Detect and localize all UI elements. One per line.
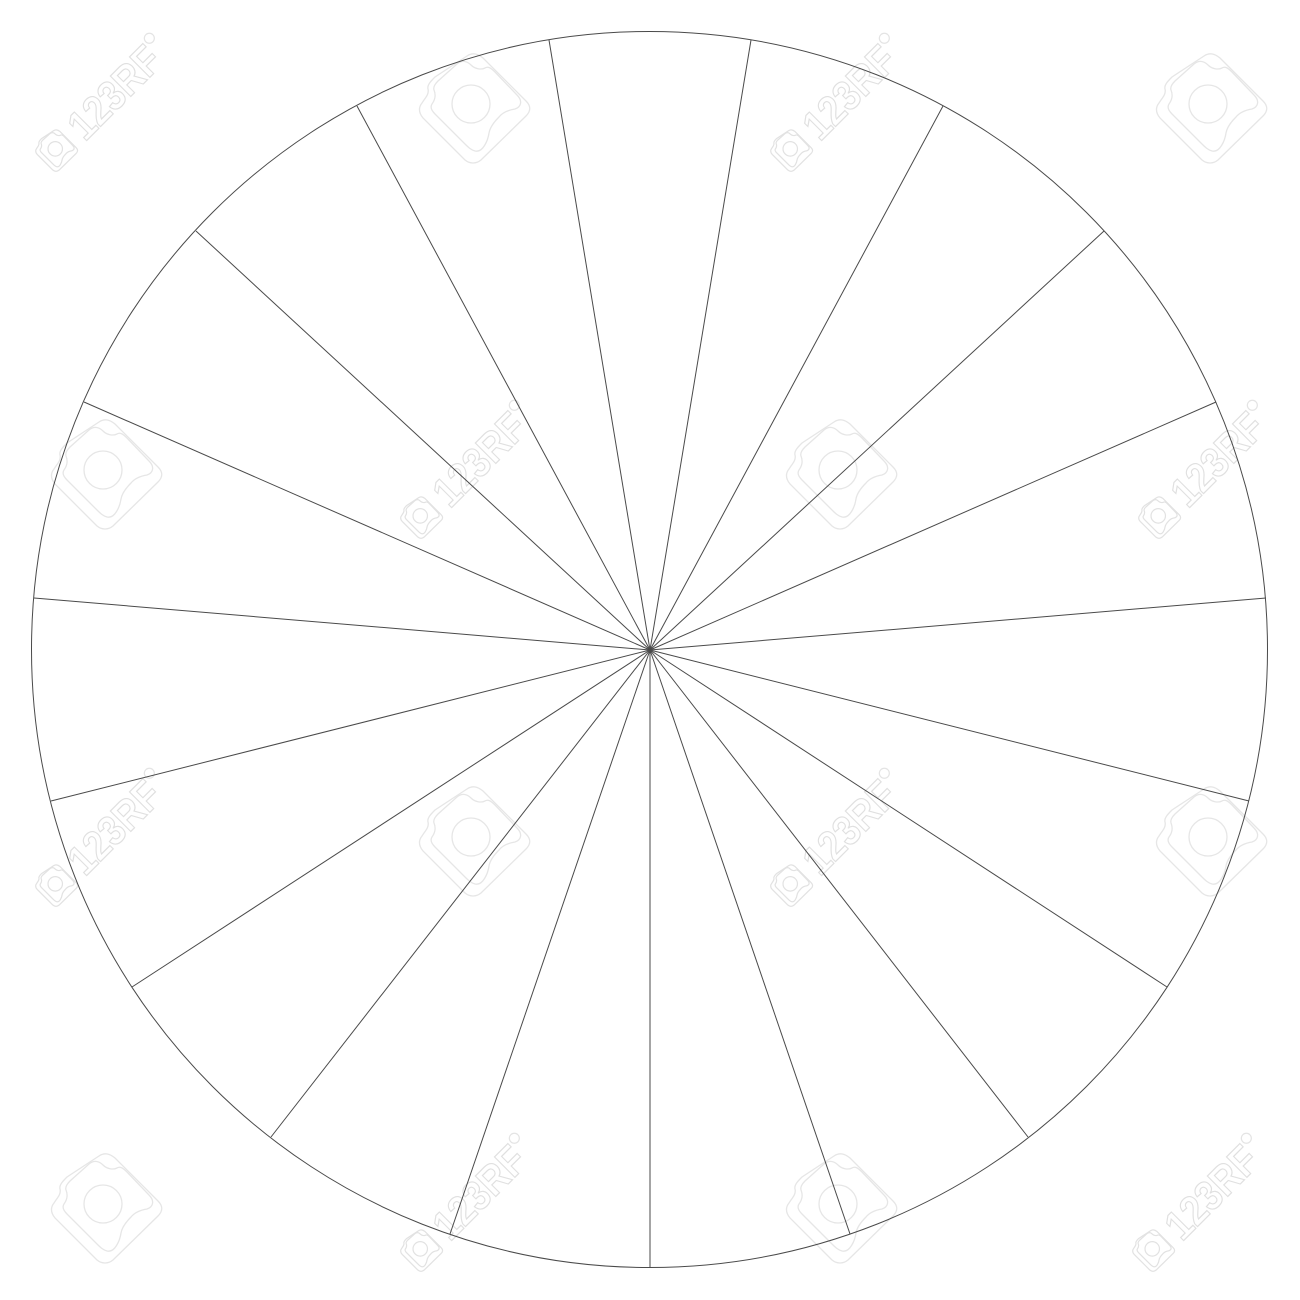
watermark logo bottom centre <box>401 1128 544 1271</box>
watermark logo middle centre <box>401 395 544 538</box>
watermark camera icon row 3 centre <box>419 787 530 896</box>
watermark camera icon row 1 right <box>1156 54 1267 163</box>
watermark logo middle right <box>1139 395 1282 538</box>
watermark camera icon row 1 <box>419 54 530 163</box>
watermark logo top left <box>36 28 179 171</box>
watermark camera icon row 2 centre <box>786 420 897 529</box>
watermark logo bottom right <box>1133 1128 1276 1271</box>
watermark camera icon row 4 left <box>51 1154 162 1263</box>
watermark logo top centre <box>771 28 914 171</box>
watermark camera icon row 2 left <box>51 420 162 529</box>
watermark camera icon row 3 right <box>1156 787 1267 896</box>
watermark logo lower left <box>36 763 179 906</box>
watermark camera icon row 4 centre <box>786 1154 897 1263</box>
watermark logo lower centre <box>771 763 914 906</box>
